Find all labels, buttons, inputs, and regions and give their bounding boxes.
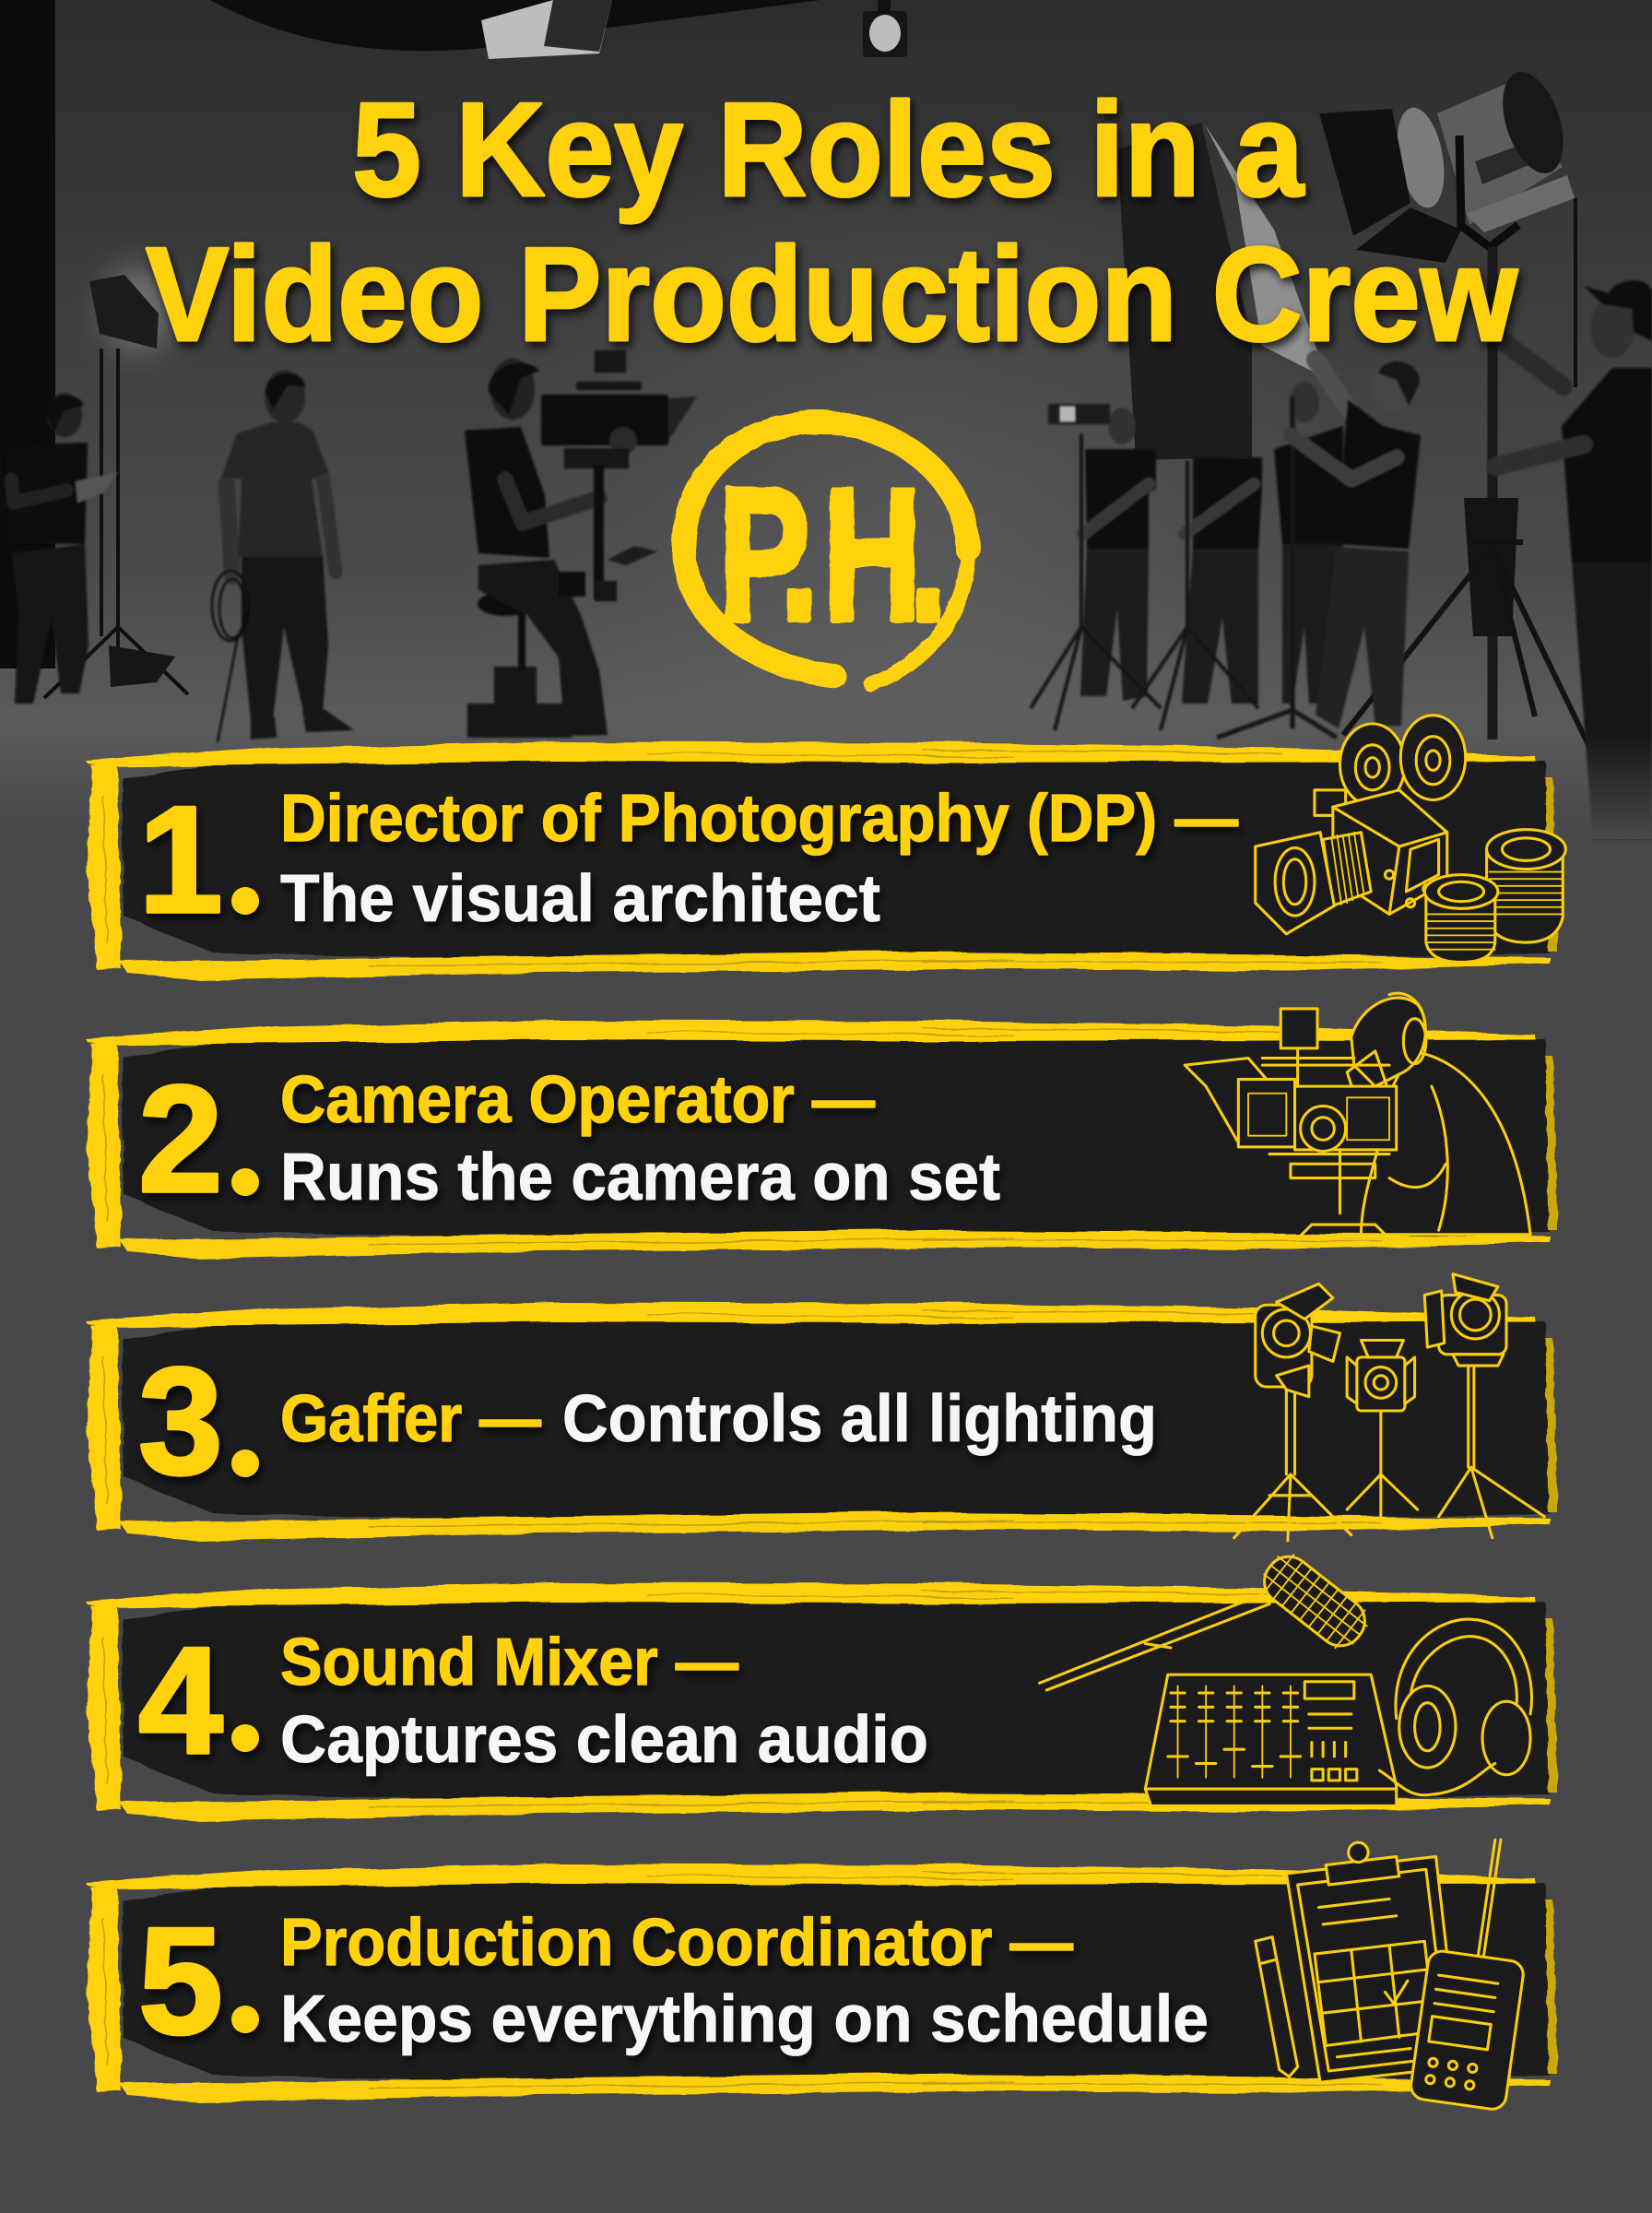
panel 3: Gaffer	[86, 1274, 1558, 1541]
number 2: 2	[138, 1054, 223, 1224]
logo: P.H. brush circle	[684, 422, 968, 684]
crew member with hat far right	[1494, 280, 1652, 839]
number 1: 1	[138, 775, 223, 944]
role text 4	[280, 1626, 928, 1777]
panel 2: Camera Operator	[86, 993, 1558, 1259]
role text 2	[280, 1063, 1000, 1214]
left light on stand	[44, 266, 188, 698]
crew member with light stand	[1031, 404, 1161, 730]
role text 4: Sound Mixer —	[280, 1626, 738, 1699]
role text 2: Runs the camera on set	[280, 1141, 1000, 1214]
number 3: 3	[138, 1336, 223, 1506]
role text 3: Gaffer —	[280, 1382, 541, 1456]
role text 3: Controls all lighting	[562, 1382, 1157, 1456]
panel 5: Production Coordinator	[86, 1840, 1558, 2111]
steadicam operator with camera rig	[465, 350, 697, 738]
role text 3	[280, 1382, 1157, 1456]
title: Video Production Crew	[146, 219, 1518, 369]
logo: P.H. brush circle: .	[909, 448, 947, 660]
icon: camera operator with headphones	[1185, 993, 1530, 1238]
crew member raising arm	[1291, 360, 1421, 728]
panel 1: Director of Photography	[86, 716, 1565, 980]
overhead softbox	[481, 0, 612, 59]
role text 1	[280, 782, 1238, 936]
role text 1: Director of Photography (DP) —	[280, 782, 1238, 856]
crew member behind flag	[1132, 457, 1262, 730]
role text 4: Captures clean audio	[280, 1703, 928, 1777]
icon: clipboard, pen and walkie-talkie	[1256, 1840, 1525, 2111]
crew member with clipboard	[5, 393, 118, 704]
logo: P.H. brush circle: .	[781, 448, 819, 660]
overhead spotlight	[863, 0, 907, 57]
icon: boom mic, mixer and headphones	[1040, 1547, 1531, 1805]
icon: cinema camera and lenses	[1256, 716, 1565, 962]
logo: P.H. brush circle: P	[719, 448, 809, 660]
title	[146, 75, 1518, 369]
photo: film studio crew scene	[0, 0, 1652, 839]
role text 5: Production Coordinator —	[280, 1906, 1073, 1980]
crew member standing with cable	[212, 370, 354, 742]
icon: three lights on tripods	[1234, 1274, 1544, 1541]
number 5: 5	[138, 1896, 223, 2065]
role text 5: Keeps everything on schedule	[280, 1982, 1209, 2056]
title: 5 Key Roles in a	[352, 75, 1304, 224]
role text 1: The visual architect	[280, 862, 880, 936]
role text 5	[280, 1906, 1209, 2056]
role text 2: Camera Operator —	[280, 1063, 875, 1137]
crew member holding stand	[1217, 382, 1343, 738]
logo: P.H. brush circle: H	[823, 448, 921, 660]
panel 4: Sound Mixer	[86, 1547, 1558, 1821]
large fresnel light	[1319, 65, 1592, 752]
number 4: 4	[138, 1615, 223, 1785]
white bounce panel and black flag	[1117, 123, 1328, 460]
